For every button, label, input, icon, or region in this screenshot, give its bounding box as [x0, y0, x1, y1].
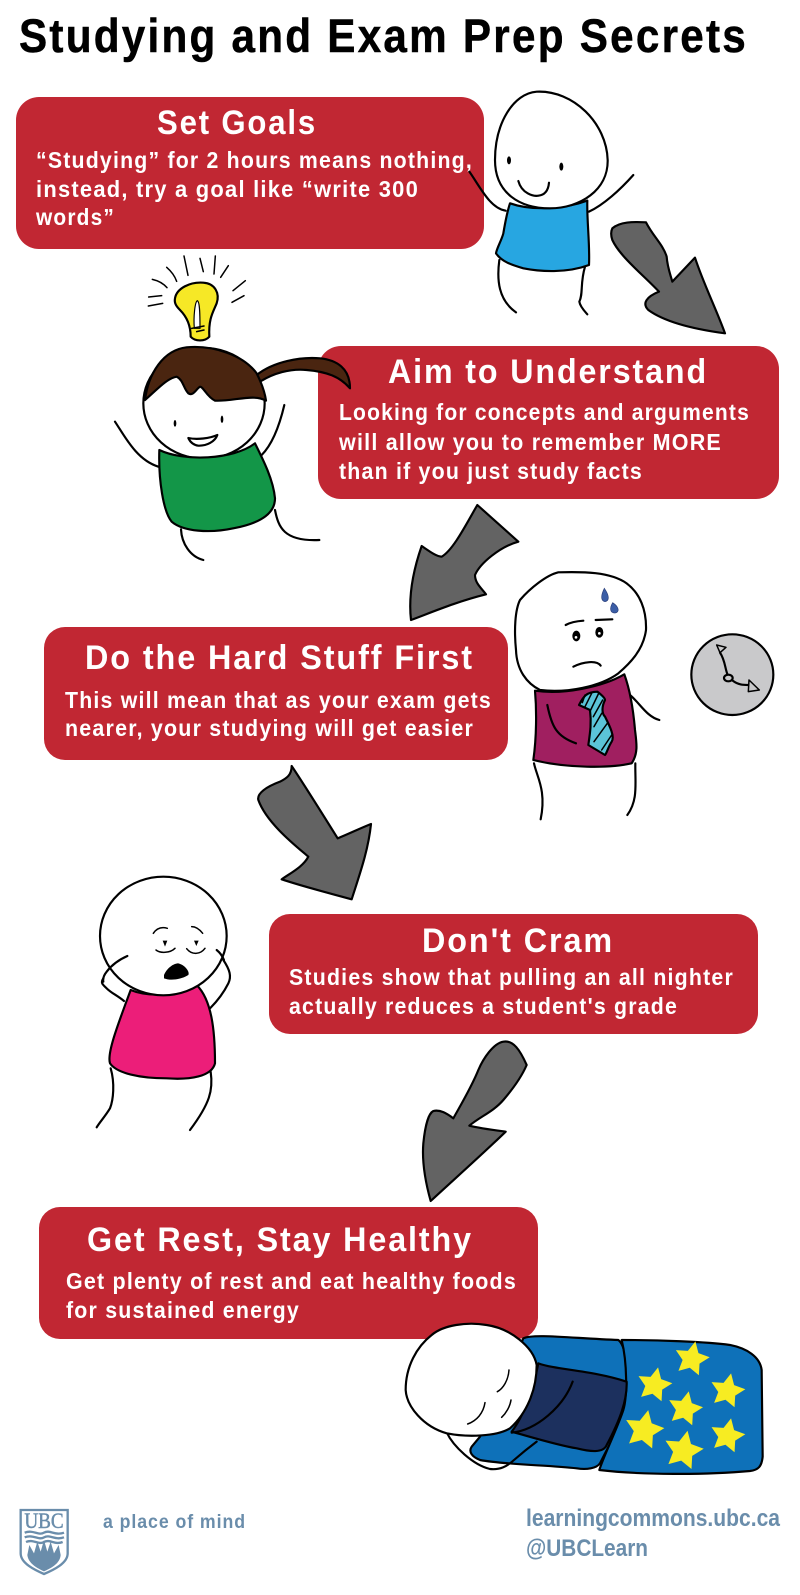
text block: aim to understand: [338, 399, 750, 484]
heading: aim to understand: Aim to Understand: [388, 353, 708, 391]
text block: do the hard stuff first: nearer, your studying will get easier: [65, 715, 474, 741]
arrow 1: [611, 222, 725, 333]
panel: get rest, stay healthy: [39, 1207, 538, 1339]
text block: aim to understand: Looking for concepts and arguments: [339, 399, 750, 425]
text block: set goals: words”: [35, 204, 115, 230]
torso: [512, 1363, 627, 1451]
hair: [145, 347, 266, 401]
icon: clock: [691, 634, 773, 715]
text block: don't cram: [289, 964, 734, 1019]
text block: set goals: [35, 147, 473, 230]
text block: set goals: instead, try a goal like “write 300: [36, 176, 419, 202]
logo: UBC crest: UBC: [24, 1508, 64, 1533]
figure: smiling student in blue shirt: [469, 92, 633, 314]
ponytail: [257, 358, 350, 388]
text block: do the hard stuff first: [65, 687, 492, 741]
text block: get rest, stay healthy: for sustained energy: [66, 1297, 300, 1323]
arrow 4: [423, 1041, 527, 1201]
tie: [579, 692, 613, 755]
panel: aim to understand: [318, 346, 779, 499]
blanket: [599, 1340, 763, 1474]
heading: get rest, stay healthy: Get Rest, Stay Healthy: [87, 1221, 473, 1259]
pillow sheet: [470, 1336, 627, 1469]
figure: student with ponytail in green shirt: [115, 347, 350, 560]
figure: student sleeping under starry blanket: [406, 1324, 763, 1474]
panel: do the hard stuff first: [44, 627, 508, 760]
heading: do the hard stuff first: Do the Hard Stuff First: [85, 639, 474, 677]
stars: [622, 1338, 748, 1471]
figure: tired student in pink shirt: [97, 877, 230, 1130]
text block: get rest, stay healthy: [66, 1268, 517, 1323]
panel: set goals: [16, 97, 484, 249]
text block: don't cram: actually reduces a student's grade: [289, 993, 678, 1019]
heading: don't cram: Don't Cram: [422, 922, 614, 960]
arrow 3: [258, 766, 371, 899]
text block: set goals: “Studying” for 2 hours means nothing,: [36, 147, 473, 173]
logo: UBC crest: [21, 1508, 68, 1574]
heading: set goals: Set Goals: [157, 104, 317, 142]
text block: get rest, stay healthy: Get plenty of rest and eat healthy foods: [66, 1268, 517, 1294]
text block: aim to understand: will allow you to remember MORE: [338, 429, 722, 455]
arrow 2: [410, 505, 518, 620]
head: [406, 1324, 537, 1436]
panel: don't cram: [269, 914, 758, 1034]
text block: aim to understand: than if you just study facts: [339, 458, 643, 484]
tagline: a place of mind: [103, 1512, 246, 1533]
twitter handle: @UBCLearn: [526, 1535, 648, 1562]
figure: worried student with tie: [515, 572, 659, 819]
text block: don't cram: Studies show that pulling an all nighter: [289, 964, 734, 990]
icon: light bulb: [148, 256, 245, 340]
text block: do the hard stuff first: This will mean that as your exam gets: [65, 687, 492, 713]
